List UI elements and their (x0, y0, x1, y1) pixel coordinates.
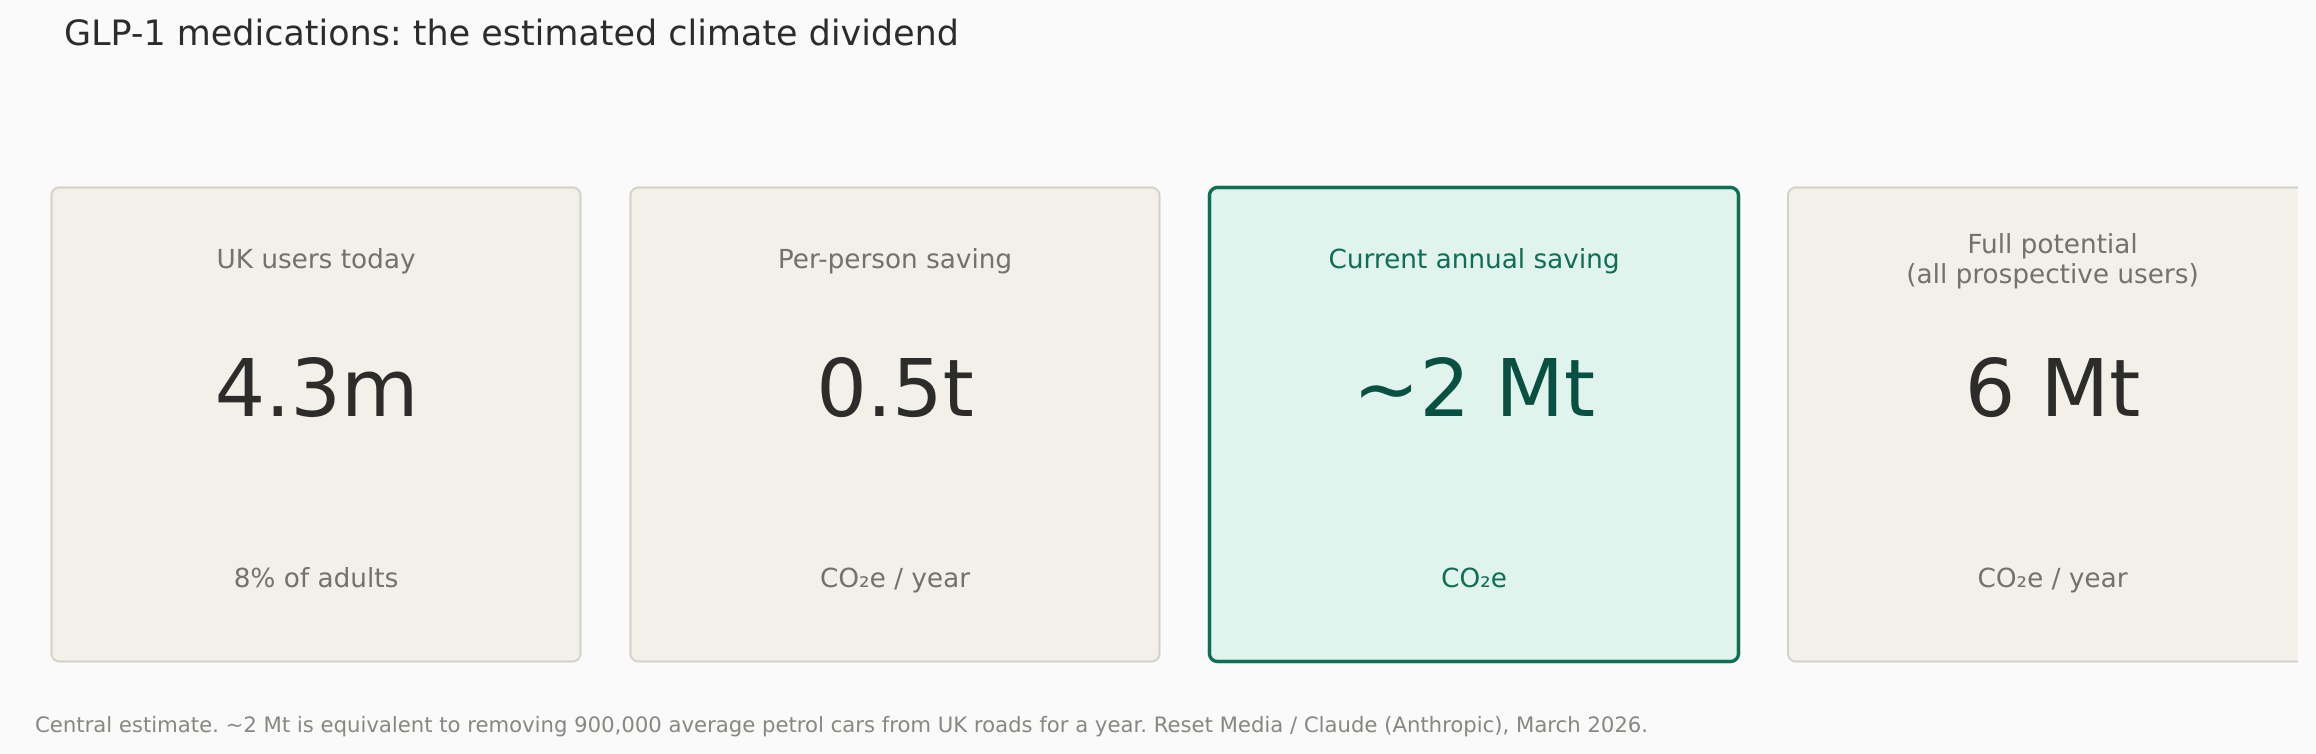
panel: UK users today (52, 188, 580, 662)
note: CO2e: CO₂e (1441, 564, 1507, 594)
label: full potential: Full potential (1967, 230, 2138, 260)
value: 6 Mt: 6 Mt (1965, 342, 2140, 435)
panel: current annual saving (highlighted) (1210, 188, 1738, 662)
value: 4.3m: 4.3m (215, 342, 418, 435)
panel: full potential (clipped at right) (1788, 188, 2316, 662)
footnote: Central estimate. ~2 Mt is equivalent to removing 900,000 average petrol cars from UK roads for a year. Reset Media / Claude (Anthropic), March 2026. (35, 712, 1648, 737)
note: CO2e per year: CO₂e / year (1977, 564, 2128, 594)
label: current annual saving: Current annual saving (1328, 245, 1620, 275)
value: 0.5t: 0.5t (816, 342, 974, 435)
value: ~2 Mt: ~2 Mt (1353, 342, 1595, 435)
title: GLP-1 medications: the estimated climate dividend (64, 14, 959, 54)
note: CO2e per year: CO₂e / year (820, 564, 970, 594)
label: per-person saving: Per-person saving (778, 245, 1012, 275)
label: UK users today: UK users today (216, 245, 416, 275)
note: 8% of adults: 8% of adults (234, 564, 398, 594)
panel: per-person saving (630, 188, 1160, 662)
label: full potential: (all prospective users) (1906, 260, 2199, 290)
